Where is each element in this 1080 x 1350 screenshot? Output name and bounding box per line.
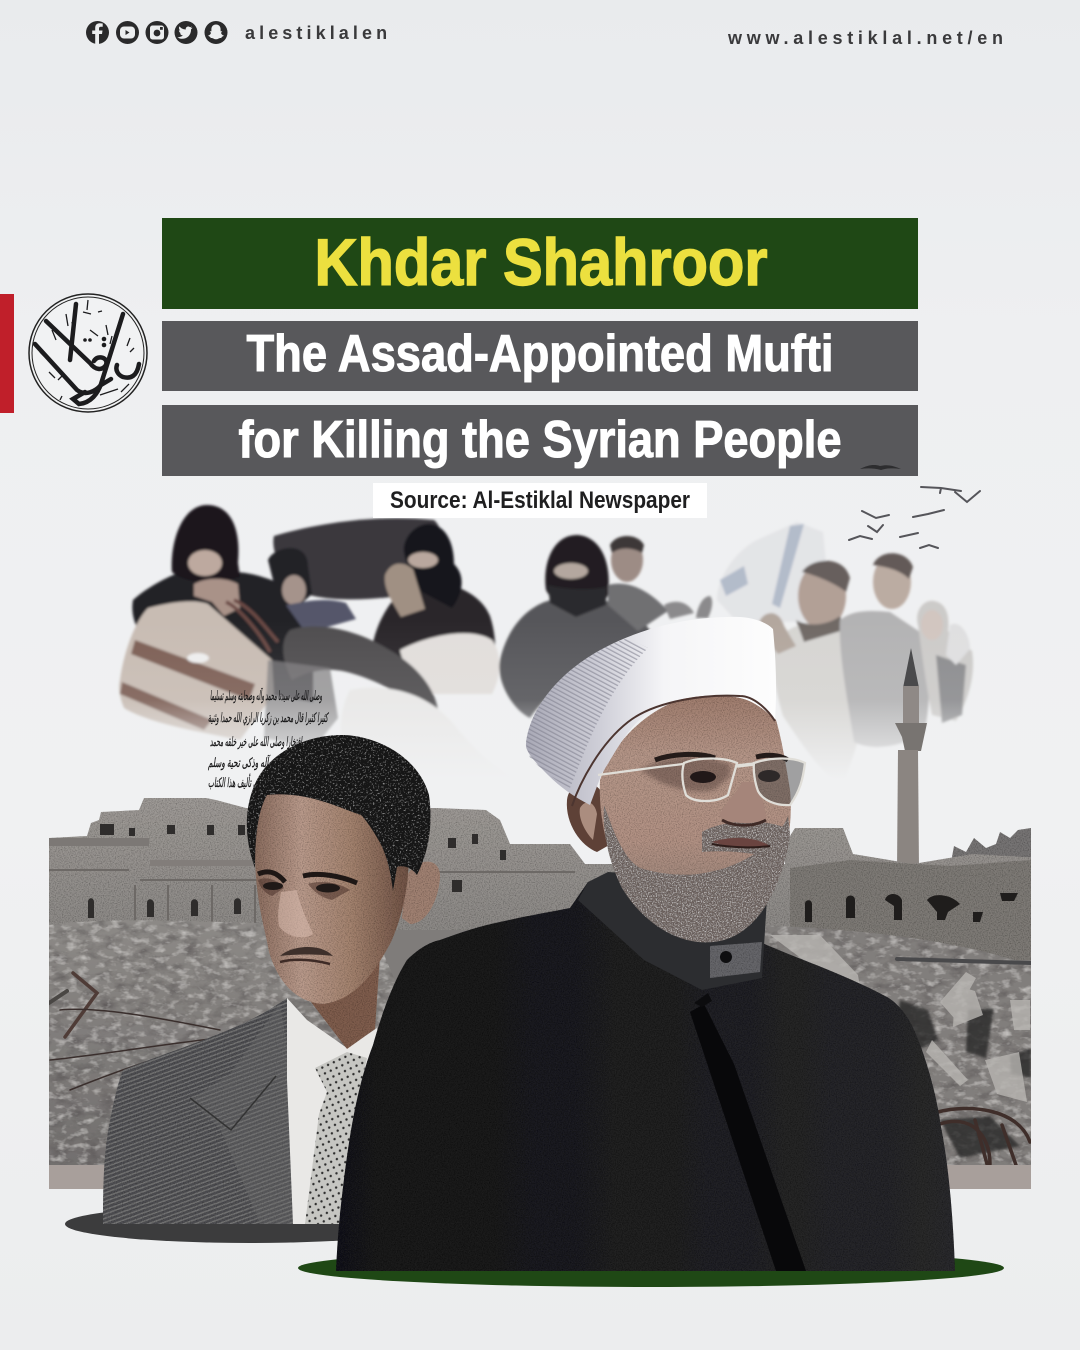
- header social icons: [86, 21, 228, 44]
- rubble dark crevices: [884, 1000, 1031, 1158]
- refugee group left: [119, 505, 520, 790]
- icon: instagram: [146, 21, 168, 44]
- turban folds: [526, 638, 648, 788]
- ear: [567, 782, 611, 852]
- eyes: [690, 771, 716, 783]
- fade under crowd: [90, 620, 990, 780]
- brows: [258, 872, 357, 883]
- right arches: [805, 893, 1018, 922]
- bird on title bar: [860, 465, 901, 470]
- rubble base: [384, 930, 1031, 982]
- center group: [499, 535, 712, 718]
- woman 2: [268, 548, 312, 612]
- subtitle line 1: The Assad-Appointed Mufti: [246, 325, 834, 383]
- glasses: [598, 758, 805, 805]
- red side bar: [0, 294, 14, 413]
- shirt: [287, 998, 387, 1224]
- logo: calligraphy seal: [29, 294, 147, 412]
- moustache: [702, 822, 786, 858]
- robe: [336, 882, 955, 1271]
- brows: [655, 754, 788, 760]
- face: [255, 760, 409, 1004]
- title: name: Khdar Shahroor: [314, 225, 768, 299]
- source box: [373, 483, 707, 518]
- handle text: alestiklalen: [245, 23, 391, 43]
- birds: [849, 487, 980, 548]
- refugee group right: [717, 522, 973, 786]
- turban lower shadow: [572, 696, 775, 806]
- figure: Bashar al-Assad: [103, 735, 440, 1224]
- title bar: name: [162, 218, 918, 309]
- handwritten manuscript text: وآله وذكى تحية وسلم: [208, 754, 272, 771]
- text: كثيرا كثيرا قال محمد بن زكريا الرازي الله حمدا وثنية: [208, 710, 329, 726]
- minaret: [895, 648, 927, 870]
- moustache: [280, 947, 333, 956]
- eye shadow band: [640, 756, 730, 791]
- neck: [298, 955, 380, 1049]
- lips: [712, 838, 770, 847]
- icon: youtube: [116, 21, 139, 44]
- head: [600, 695, 791, 938]
- right ruin wall: [790, 860, 1031, 960]
- website url: www.alestiklal.net/en: [727, 28, 1007, 48]
- rubble field: [49, 920, 395, 1165]
- girder and rebar: [49, 959, 1031, 1165]
- handwritten manuscript text: افتخارا وصلى الله على خير خلقه محمد: [210, 734, 303, 750]
- woman 1 body: [132, 568, 313, 702]
- icon: facebook: [86, 21, 109, 44]
- sleeve: [283, 626, 438, 716]
- eye sockets: [258, 878, 350, 900]
- centre seam: [690, 1004, 806, 1271]
- subtitle bar 2: [162, 405, 918, 476]
- subtitle bar 1: [162, 321, 918, 391]
- hand: [194, 579, 240, 616]
- handwritten manuscript text: [208, 687, 329, 791]
- beard: [604, 806, 790, 942]
- white bundle: [400, 633, 500, 694]
- collar: [578, 872, 768, 990]
- figure: Mufti Khdar Shahroor: [336, 617, 955, 1271]
- tie: [305, 1052, 367, 1224]
- icon: twitter: [174, 21, 198, 44]
- woman 3: [370, 582, 495, 686]
- scene: displaced people photo, faded: [90, 505, 990, 850]
- left building windows: [88, 824, 506, 918]
- ear: [402, 862, 440, 924]
- rubble light blocks: [770, 935, 1030, 1102]
- collar clasp: [710, 942, 762, 978]
- upper buildings: [49, 798, 1031, 930]
- icon: snapchat: [204, 21, 228, 44]
- woman 1 hood: [172, 505, 240, 583]
- bag: [119, 601, 274, 740]
- dark horizontal band: [49, 838, 149, 846]
- woman 1 face: [188, 550, 222, 576]
- strap: [226, 600, 278, 652]
- shadow ellipse: green: [298, 1249, 1004, 1287]
- source text: Source: Al-Estiklal Newspaper: [390, 487, 690, 514]
- subtitle line 2: for Killing the Syrian People: [238, 411, 842, 469]
- lapel: [190, 1004, 296, 1224]
- hair: [247, 735, 430, 891]
- suit: [103, 998, 303, 1224]
- nose highlight: [278, 890, 313, 937]
- panel: ruined city: [49, 798, 1080, 1173]
- text: وصلى الله على سيدنا محمد وآله وصحابته وسلم تسليما: [210, 687, 322, 704]
- handwritten manuscript text: إلى تأليف هذا الكتاب: [208, 773, 263, 791]
- lower torso: [264, 660, 338, 748]
- shadow ellipse: grey: [65, 1205, 435, 1243]
- turban: [526, 617, 776, 805]
- skyline speckle right: [952, 828, 1031, 858]
- eyes: [263, 882, 283, 890]
- bundle on back: [273, 518, 443, 599]
- left building lines: [49, 870, 575, 925]
- bottom pale strip: [49, 1165, 1031, 1189]
- nose: [720, 782, 766, 823]
